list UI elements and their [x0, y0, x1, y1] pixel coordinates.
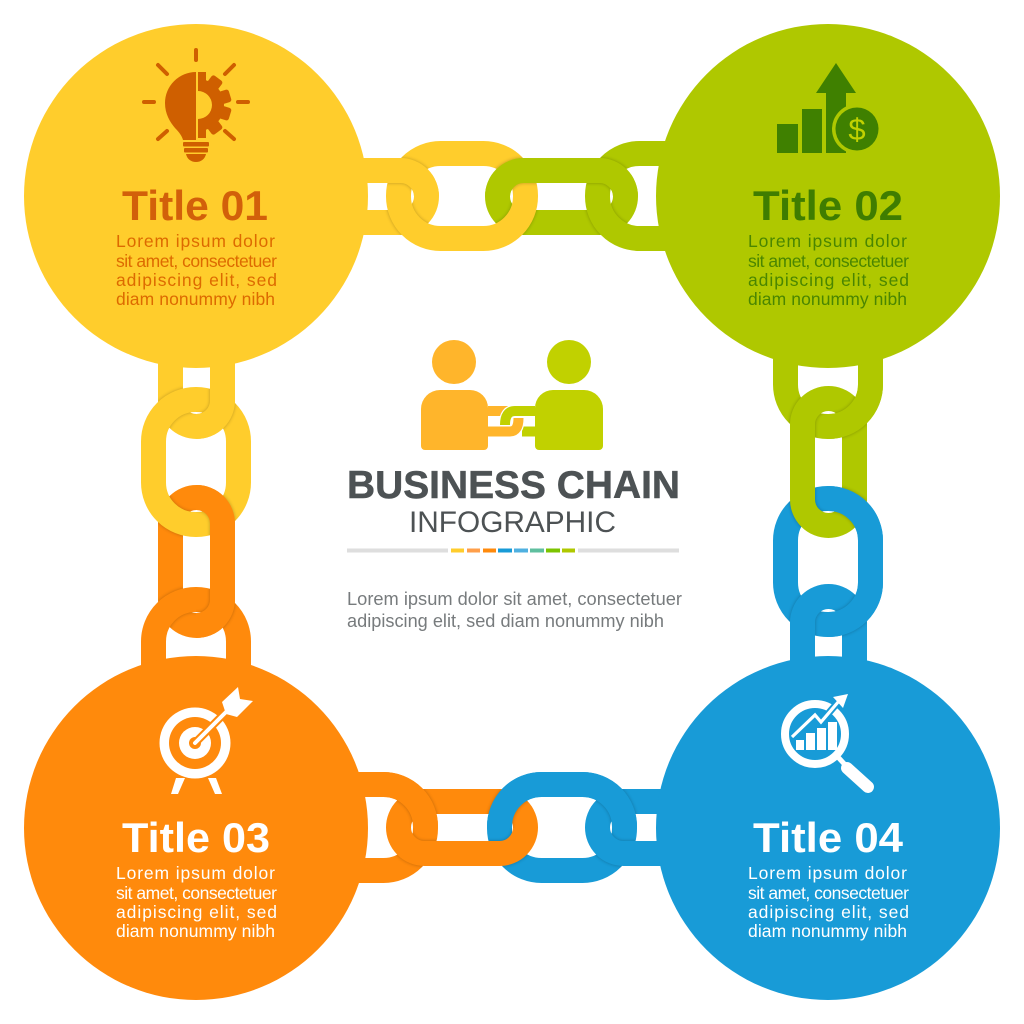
text: title 01 body — [116, 231, 277, 309]
chain: right green to blue — [773, 358, 883, 660]
icon: light bulb with gear — [144, 50, 248, 162]
panel: title 03 orange circle — [24, 656, 368, 1000]
heading: title 01: Title 01 — [122, 182, 268, 229]
panel: title 01 yellow circle — [24, 24, 368, 368]
panel: title 02 green circle — [656, 24, 1000, 368]
heading: title 02: Title 02 — [753, 182, 903, 229]
text: title 04 body: diam nonummy nibh — [748, 921, 907, 941]
chain: top yellow to green — [364, 141, 665, 251]
icon: target with arrow — [160, 687, 253, 794]
text: title 02 body — [748, 231, 909, 309]
text: title 01 body: adipiscing elit, sed — [116, 270, 277, 290]
heading: title 04: Title 04 — [753, 814, 904, 861]
text: central description — [347, 589, 682, 631]
icon: growth bars with dollar coin — [777, 63, 882, 154]
text: central description: adipiscing elit, sed diam nonummy nibh — [347, 611, 664, 631]
chain: bottom orange to blue — [358, 772, 660, 883]
text: title 03 body: adipiscing elit, sed — [116, 902, 277, 922]
text: title 04 body: adipiscing elit, sed — [748, 902, 909, 922]
text: title 02 body: Lorem ipsum dolor — [748, 231, 907, 251]
text: title 04 body — [748, 863, 909, 941]
heading: business chain: BUSINESS CHAIN — [347, 464, 680, 507]
text: title 04 body: sit amet, consectetuer — [748, 883, 909, 903]
text: title 03 body: diam nonummy nibh — [116, 921, 275, 941]
text: title 03 body: sit amet, consectetuer — [116, 883, 277, 903]
icon: two people linked by a chain — [421, 340, 603, 450]
panel: title 04 blue circle — [656, 656, 1000, 1000]
text: title 02 body: adipiscing elit, sed — [748, 270, 909, 290]
text: title 01 body: sit amet, consectetuer — [116, 251, 277, 271]
text: central description: Lorem ipsum dolor sit amet, consectetuer — [347, 589, 682, 609]
chain: left yellow to orange — [141, 364, 251, 665]
icon: magnifier with rising chart — [785, 694, 868, 787]
text: title 01 body: diam nonummy nibh — [116, 289, 275, 309]
divider with colour dashes — [347, 548, 679, 552]
heading: infographic: INFOGRAPHIC — [409, 506, 616, 539]
text: title 01 body: Lorem ipsum dolor — [116, 231, 275, 251]
text: title 03 body: Lorem ipsum dolor — [116, 863, 275, 883]
heading: title 03: Title 03 — [122, 814, 270, 861]
text: title 02 body: sit amet, consectetuer — [748, 251, 909, 271]
text: title 04 body: Lorem ipsum dolor — [748, 863, 907, 883]
icon: growth bars with dollar coin: $ — [848, 112, 866, 147]
text: title 02 body: diam nonummy nibh — [748, 289, 907, 309]
text: title 03 body — [116, 863, 277, 941]
